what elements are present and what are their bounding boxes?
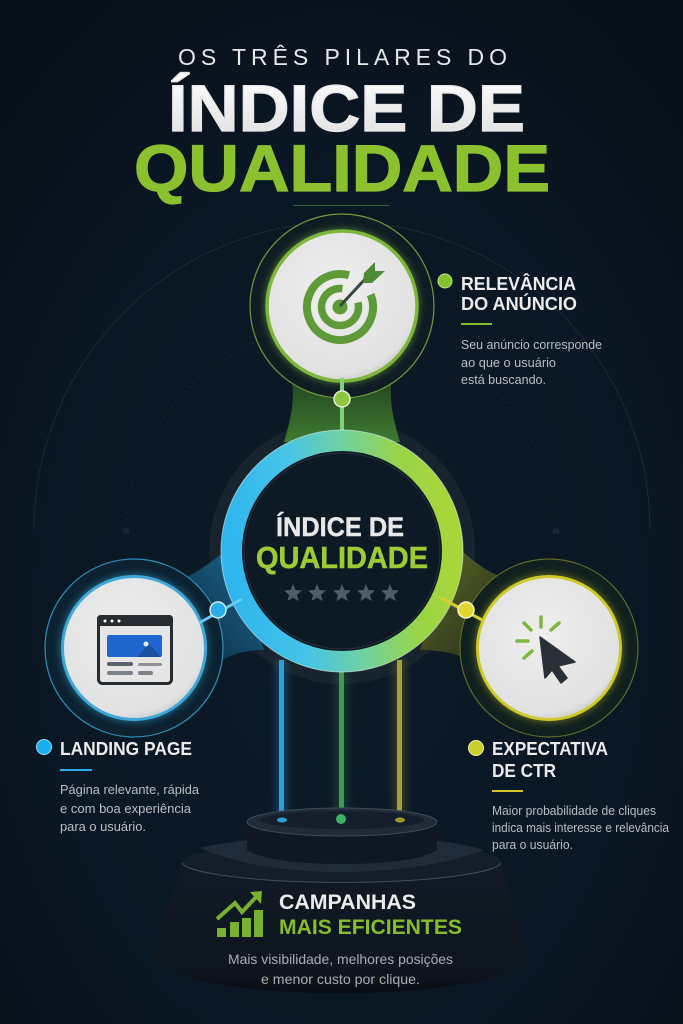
label: relevance: Seu anúncio corresponde — [461, 337, 602, 352]
title line 3: QUALIDADE — [134, 131, 550, 205]
title line 1: OS TRÊS PILARES DO — [178, 44, 507, 70]
pedestal — [153, 808, 528, 993]
outcome heading green: MAIS EFICIENTES — [279, 916, 462, 939]
icon: target with arrow — [297, 262, 385, 350]
top node: relevance — [250, 214, 434, 398]
left connector dot — [199, 599, 242, 623]
beams to pedestal — [278, 660, 403, 820]
label: relevance: está buscando. — [461, 372, 546, 387]
icon: growth chart — [217, 891, 263, 937]
label: landing page: Página relevante, rápida — [60, 782, 200, 797]
center halo — [209, 418, 475, 684]
label: CTR expectation: DE CTR — [492, 761, 556, 781]
outcome description: Mais visibilidade, melhores posições — [228, 951, 453, 967]
label: CTR expectation: EXPECTATIVA — [492, 739, 608, 759]
connector: blue band — [170, 546, 264, 672]
label: CTR expectation: indica mais interesse e relevância — [492, 820, 670, 835]
title line 2: ÍNDICE DE — [168, 71, 525, 145]
center title: ÍNDICE DE — [276, 511, 404, 542]
lower base — [153, 863, 528, 993]
label: landing page: LANDING PAGE — [60, 739, 192, 759]
label: relevance: DO ANÚNCIO — [461, 293, 577, 314]
rating stars — [284, 584, 399, 601]
upper disc — [247, 822, 437, 864]
connector: yellow band — [420, 546, 520, 668]
icon: mouse cursor — [517, 617, 575, 683]
connector: green neck — [284, 372, 400, 442]
outcome heading: CAMPANHAS — [279, 891, 416, 914]
label: relevance: RELEVÂNCIA — [461, 273, 576, 294]
label: landing page: e com boa experiência — [60, 801, 192, 816]
label: landing page — [36, 739, 200, 834]
icon: browser window — [97, 615, 173, 684]
title — [134, 44, 550, 206]
label: CTR expectation: Maior probabilidade de cliques — [492, 803, 656, 818]
left node: landing page — [45, 559, 223, 737]
center title green: QUALIDADE — [256, 540, 428, 575]
right connector dot — [441, 598, 484, 621]
right node: CTR — [460, 559, 638, 737]
top connector dot — [334, 378, 350, 432]
label: landing page: para o usuário. — [60, 819, 146, 834]
outcome block: e menor custo por clique. — [261, 971, 420, 987]
center node — [221, 430, 463, 672]
decorative orbit arcs — [34, 222, 650, 534]
label: relevance — [438, 273, 602, 387]
label: relevance: ao que o usuário — [461, 355, 556, 370]
label: CTR expectation — [468, 739, 670, 852]
label: CTR expectation: para o usuário. — [492, 837, 573, 852]
outcome block — [217, 891, 462, 987]
